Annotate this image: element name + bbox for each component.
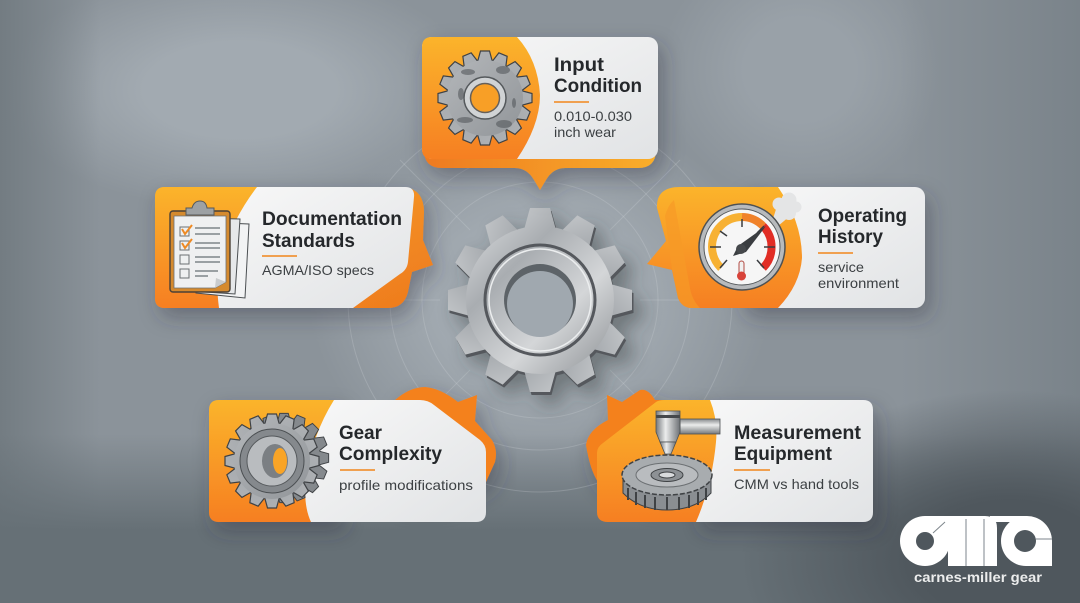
card: Operating History: environment bbox=[818, 275, 899, 291]
logo mark details bbox=[933, 519, 1052, 566]
card: Measurement Equipment: Equipment bbox=[734, 443, 832, 465]
logo mark bbox=[900, 516, 1052, 566]
heading: Gear bbox=[339, 422, 382, 444]
orange icon panel bbox=[155, 187, 262, 308]
orange icon panel and pointer bbox=[647, 187, 802, 308]
detail text: CMM vs hand tools bbox=[734, 476, 859, 492]
white text panel bbox=[740, 187, 925, 308]
card: Documentation Standards bbox=[155, 187, 433, 308]
detail text: AGMA/ISO specs bbox=[262, 262, 374, 278]
heading: Measurement bbox=[734, 422, 862, 444]
card: Documentation Standards: Standards bbox=[262, 230, 355, 252]
logo wordmark: carnes-miller gear bbox=[914, 569, 1043, 585]
card backing and pointer bbox=[422, 37, 658, 190]
card: Input Condition: Condition bbox=[554, 75, 642, 97]
detail text: profile modifications bbox=[339, 477, 473, 493]
detail text: 0.010-0.030 bbox=[554, 108, 632, 124]
orange icon panel bbox=[422, 37, 540, 159]
orange icon panel bbox=[209, 400, 340, 522]
card: Operating History bbox=[647, 187, 925, 308]
card: Measurement Equipment bbox=[586, 390, 873, 522]
logo: carnes-miller gear bbox=[900, 516, 1052, 585]
card: Input Condition bbox=[422, 37, 658, 190]
heading: Input bbox=[554, 54, 605, 76]
detail text: service bbox=[818, 259, 864, 275]
card: Operating History: History bbox=[818, 226, 883, 248]
white text panel bbox=[305, 400, 486, 522]
orange backing and pointer bbox=[586, 390, 700, 500]
orange icon panel bbox=[597, 400, 716, 522]
icon: pressure gauge with steam bbox=[699, 192, 802, 290]
orange backing and pointer bbox=[395, 387, 496, 500]
heading: Documentation bbox=[262, 208, 402, 230]
radial target lines bbox=[340, 108, 740, 492]
white text panel bbox=[217, 187, 414, 308]
card: Gear Complexity bbox=[209, 387, 496, 522]
white text panel bbox=[696, 400, 873, 522]
icon: complex gear bbox=[225, 413, 329, 508]
icon: worn gear bbox=[438, 51, 532, 145]
card: Gear Complexity: Complexity bbox=[339, 443, 442, 465]
icon: clipboard bbox=[170, 201, 249, 298]
card backing and pointer bbox=[155, 187, 433, 308]
heading: Operating bbox=[818, 205, 907, 227]
icon: CMM probe over gear bbox=[622, 411, 720, 510]
card: Input Condition: inch wear bbox=[554, 124, 616, 140]
central metal gear bbox=[448, 208, 634, 395]
